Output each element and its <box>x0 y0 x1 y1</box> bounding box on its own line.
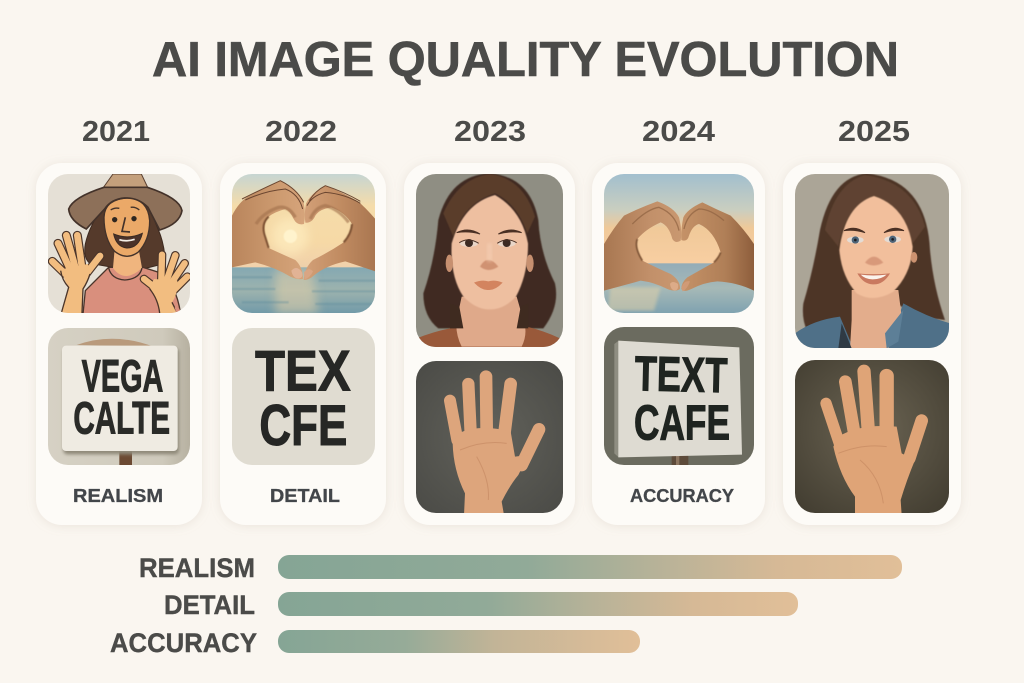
image: misspelled sign VEGA CALTE: VEGA <box>82 351 163 402</box>
year headings: 2022 <box>265 116 337 148</box>
bar: realism <box>139 553 902 583</box>
caption: realism: REALISM <box>73 486 163 506</box>
caption: accuracy: ACCURACY <box>630 486 734 506</box>
panel: 2023 <box>404 163 575 525</box>
image: misspelled sign TEX CFE: CFE <box>259 394 347 458</box>
image: misspelled sign TEX CFE: TEX <box>255 340 351 404</box>
right hand <box>144 255 187 291</box>
image: correct sign TEXT CAFE: CAFE <box>634 395 730 450</box>
year headings: 2021 <box>82 116 150 148</box>
image: correct sign TEXT CAFE: TEXT <box>634 346 728 403</box>
caption: detail: DETAIL <box>270 486 340 506</box>
image: misspelled sign TEX CFE <box>230 327 377 467</box>
image: misspelled sign VEGA CALTE: CALTE <box>73 392 170 443</box>
image: improved heart hands over sea <box>604 174 754 313</box>
year headings <box>82 116 910 148</box>
panel: 2025 <box>783 163 961 525</box>
panel: 2022 <box>220 163 386 525</box>
panel: 2024 <box>592 163 765 525</box>
year headings: 2024 <box>642 116 715 148</box>
chart: progress bars <box>110 553 902 658</box>
year headings: 2023 <box>454 116 526 148</box>
image: correct sign TEXT CAFE <box>602 325 755 467</box>
bar: realism: REALISM <box>139 553 255 583</box>
bar: detail: DETAIL <box>164 590 255 620</box>
bar: detail <box>164 590 798 620</box>
image: misspelled sign VEGA CALTE <box>47 327 192 467</box>
bar: accuracy: ACCURACY <box>110 628 257 658</box>
image: heart hands over sunset sea <box>232 174 375 314</box>
image: smiling woman portrait <box>793 173 950 350</box>
title: AI IMAGE QUALITY EVOLUTION <box>152 33 899 87</box>
image: realistic open hand <box>413 360 565 515</box>
year headings: 2025 <box>838 116 910 148</box>
left hand <box>52 235 100 276</box>
bar: accuracy <box>110 628 640 658</box>
image: accurate open hand <box>793 360 950 515</box>
image: realistic woman portrait <box>413 173 565 350</box>
image: cartoon woman in hat waving <box>48 174 191 314</box>
panel: 2021 <box>36 163 202 525</box>
